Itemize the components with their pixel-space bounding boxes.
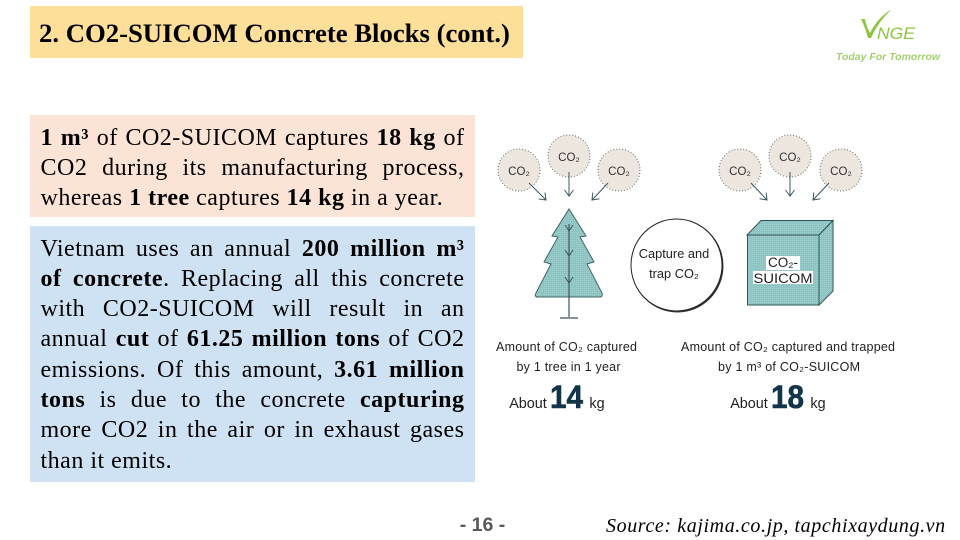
caption: SUICOM: 18 — [771, 379, 804, 415]
icon: capture and trap coin: trap CO₂ — [649, 266, 699, 281]
caption: tree: 14 — [550, 379, 583, 415]
source: Source: kajima.co.jp, tapchixaydung.vn — [606, 515, 946, 537]
panel: Vietnam concrete text: than it emits. — [40, 448, 172, 474]
icon: tree — [535, 209, 602, 318]
caption: tree — [496, 340, 637, 415]
caption: SUICOM — [681, 340, 895, 415]
CO2 circles: tree side: CO₂ — [608, 166, 630, 178]
panel: capture comparison text: whereas 1 tree captures 14 kg in a year. — [40, 185, 443, 211]
diagram: CO2 capture by tree and CO2-SUICOM — [496, 134, 895, 415]
CO2 circles: tree side: CO₂ — [558, 152, 580, 164]
icon: CO2-SUICOM block: SUICOM — [754, 271, 812, 286]
arrows: tree side — [529, 172, 608, 200]
panel: capture comparison text: CO2 during its manufacturing process, — [40, 155, 464, 181]
logo: VNGE: Today For Tomorrow — [836, 51, 941, 63]
CO2 circles: SUICOM side: CO₂ — [779, 152, 801, 164]
panel: Vietnam concrete text: more CO2 in the air or in exhaust gases — [40, 417, 464, 443]
caption: tree: About — [509, 396, 547, 412]
panel: capture comparison text: 1 m³ of CO2-SUICOM captures 18 kg of — [40, 125, 464, 151]
caption: tree: by 1 tree in 1 year — [516, 360, 620, 374]
caption: SUICOM: Amount of CO₂ captured and trapped — [681, 340, 895, 354]
icon: capture and trap coin — [631, 219, 723, 312]
caption: tree: Amount of CO₂ captured — [496, 340, 637, 354]
panel: Vietnam concrete text: Vietnam uses an annual 200 million m³ — [40, 236, 465, 262]
panel: Vietnam concrete text — [30, 226, 475, 482]
panel: Vietnam concrete text: of concrete. Replacing all this concrete — [40, 266, 465, 292]
caption: SUICOM: by 1 m³ of CO₂-SUICOM — [718, 360, 860, 374]
panel: capture comparison text — [30, 115, 475, 217]
CO2 circles: SUICOM side — [719, 135, 862, 191]
CO2 circles: tree side — [498, 135, 640, 191]
page number: - 16 - — [460, 514, 505, 536]
CO2 circles: tree side: CO₂ — [508, 166, 530, 178]
logo: VNGE — [836, 9, 941, 63]
caption: SUICOM: About — [730, 396, 768, 412]
icon: CO2-SUICOM block — [747, 220, 833, 305]
title: 2. CO2-SUICOM Concrete Blocks (cont.) — [39, 18, 510, 48]
icon: capture and trap coin: Capture and — [639, 246, 709, 261]
CO2 circles: SUICOM side: CO₂ — [729, 166, 751, 178]
panel: Vietnam concrete text: emissions. Of this amount, 3.61 million — [40, 357, 464, 383]
caption: tree: kg — [589, 396, 605, 412]
panel: Vietnam concrete text: tons is due to the concrete capturing — [40, 387, 464, 413]
caption: SUICOM: kg — [810, 396, 826, 412]
panel: Vietnam concrete text: with CO2-SUICOM will result in an — [40, 296, 464, 322]
arrows: SUICOM side — [751, 172, 829, 200]
title — [30, 6, 523, 58]
logo: VNGE: NGE — [877, 25, 916, 43]
panel: Vietnam concrete text: annual cut of 61.25 million tons of CO2 — [40, 326, 464, 352]
icon: CO2-SUICOM block: CO₂- — [768, 255, 798, 270]
CO2 circles: SUICOM side: CO₂ — [830, 166, 852, 178]
